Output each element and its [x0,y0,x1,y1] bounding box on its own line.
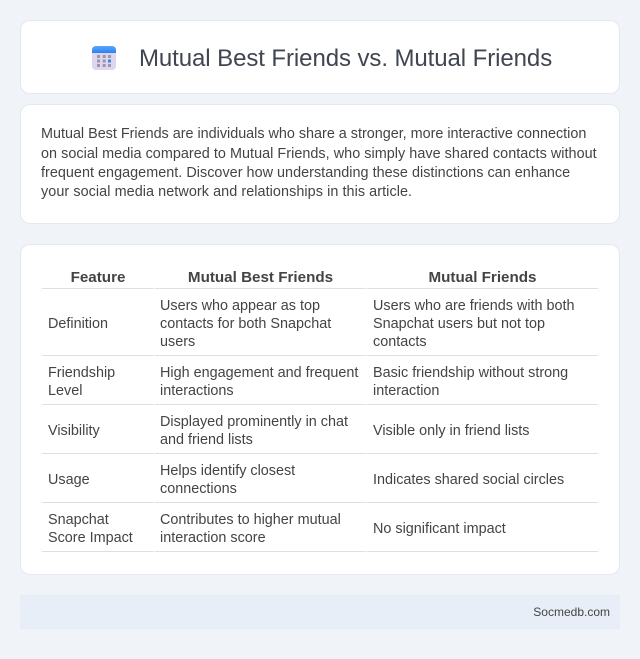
comparison table: users [160,334,195,350]
comparison table: Snapchat users but not top [373,316,545,332]
comparison table: Mutual Best Friends [188,269,333,286]
comparison table: No significant impact [373,521,506,537]
icon: calendar [92,46,116,70]
comparison table: Users who appear as top [160,298,320,314]
comparison table: contacts for both Snapchat [160,316,331,332]
comparison table: Friendship [48,365,115,381]
comparison table: High engagement and frequent [160,365,358,381]
comparison table: Helps identify closest [160,463,295,479]
footer bar [20,595,620,629]
comparison table: and friend lists [160,432,253,448]
comparison table: Level [48,383,82,399]
comparison table: Visibility [48,423,100,439]
comparison table: Usage [48,472,90,488]
panel: introduction card [20,104,620,224]
comparison table: Mutual Friends [428,269,536,286]
comparison table: connections [160,481,237,497]
text block: introduction: your social media network and relationships in this article. [41,184,412,200]
comparison table: Contributes to higher mutual [160,512,341,528]
comparison table: Displayed prominently in chat [160,414,348,430]
footer text: Socmedb.com [533,605,610,619]
comparison table: Visible only in friend lists [373,423,530,439]
comparison table: contacts [373,334,427,350]
comparison table [42,269,598,552]
text block: introduction: Mutual Best Friends are individuals who share a stronger, more interactive connection [41,126,586,142]
comparison table: Basic friendship without strong [373,365,568,381]
comparison table: Indicates shared social circles [373,472,564,488]
comparison table: Users who are friends with both [373,298,575,314]
comparison table: Score Impact [48,530,133,546]
comparison table: Definition [48,316,108,332]
comparison table: interactions [160,383,234,399]
comparison table: Snapchat [48,512,109,528]
comparison table: interaction score [160,530,266,546]
panel: comparison table card [20,244,620,575]
title: Mutual Best Friends vs. Mutual Friends [139,45,552,72]
panel: title card [20,20,620,94]
text block: introduction [41,126,597,200]
text block: introduction: on social media compared to Mutual Friends, who simply have shared contacts without [41,146,597,162]
comparison table: Feature [71,269,125,286]
text block: introduction: frequent engagement. Discover how understanding these distinctions can enhance [41,165,570,181]
comparison table: interaction [373,383,439,399]
